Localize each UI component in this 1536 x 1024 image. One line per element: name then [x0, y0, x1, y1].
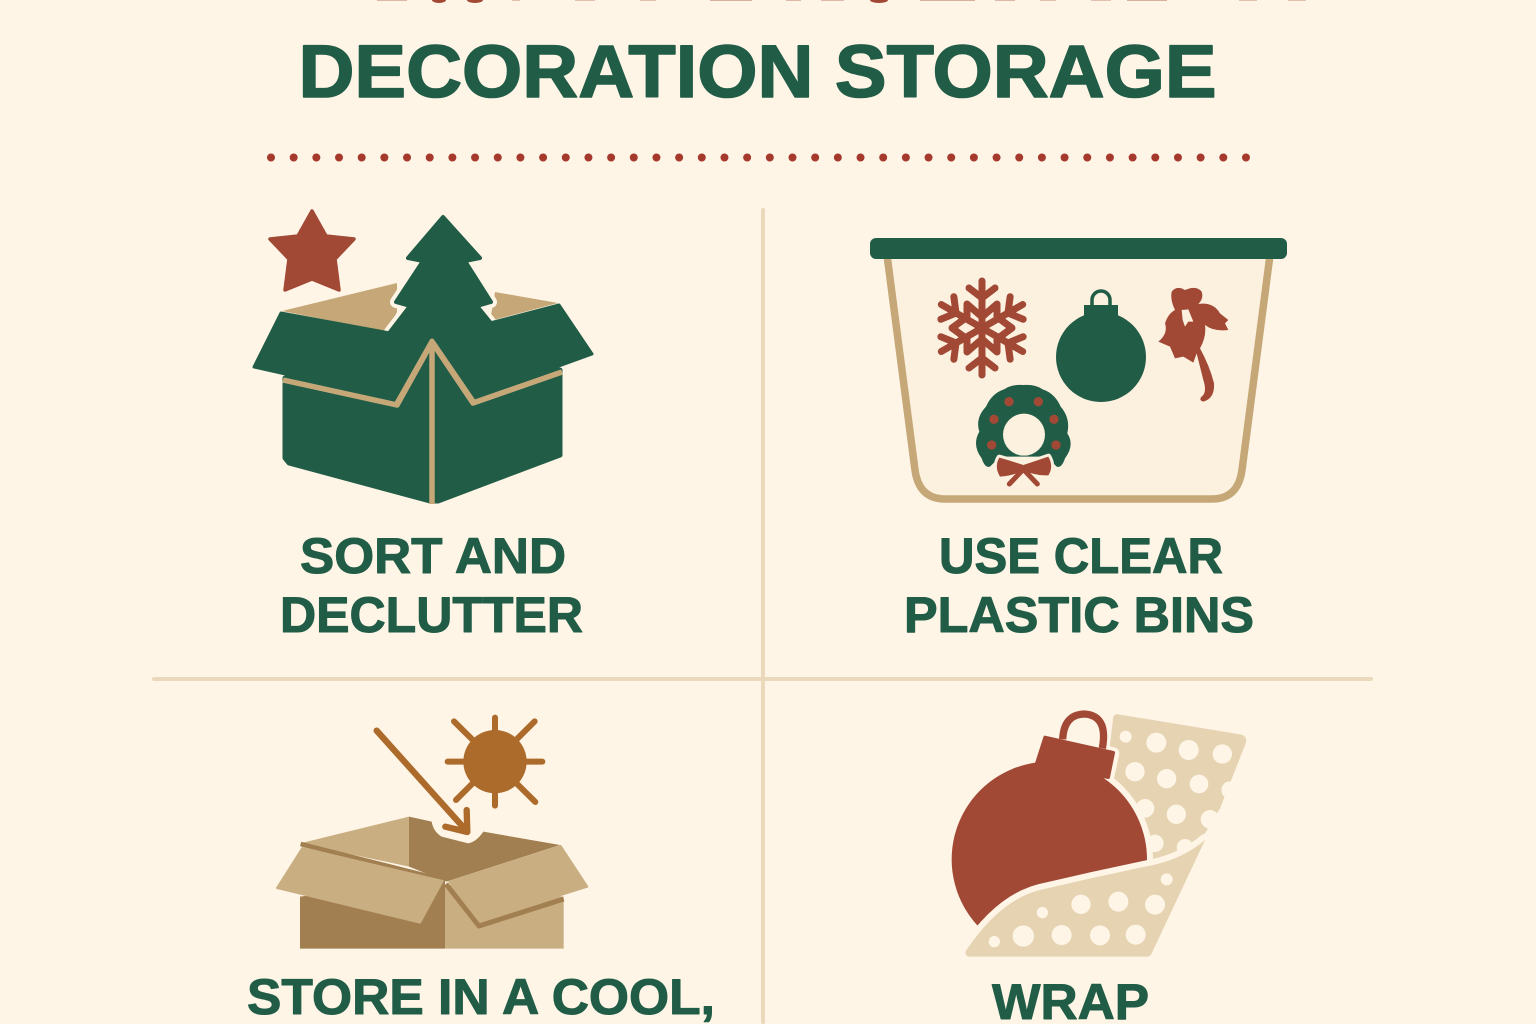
- icon: arrow into box: [377, 731, 467, 832]
- bubble wrap back sheet: [1103, 714, 1246, 873]
- panel: use clear plastic bins: [870, 238, 1287, 643]
- label: store in a cool: STORE IN A COOL,: [247, 969, 715, 1024]
- icon: wreath: [976, 385, 1071, 484]
- clipped heading remnant at top edge: [377, 0, 1306, 3]
- label: sort and declutter: SORT AND: [300, 528, 566, 584]
- icon: ornament wrapped in bubble wrap: [930, 714, 1246, 960]
- icon: cardboard box: [277, 817, 587, 949]
- icon: ribbon bow: [1158, 288, 1228, 402]
- dotted divider: [271, 154, 1246, 162]
- label: sort and declutter: DECLUTTER: [280, 587, 583, 643]
- label: use clear plastic bins: PLASTIC BINS: [904, 587, 1254, 643]
- panel: sort and declutter: [254, 211, 592, 643]
- label: sort and declutter: [280, 528, 583, 643]
- panel: store in a cool place: [247, 718, 715, 1024]
- red ornament: [952, 714, 1147, 957]
- label: use clear plastic bins: USE CLEAR: [939, 528, 1223, 584]
- icon: clear bin: [870, 238, 1287, 499]
- icon: green ornament: [1056, 291, 1146, 402]
- bubble wrap front sheet: [930, 840, 1205, 960]
- icon: sun: [448, 718, 542, 806]
- panel: wrap: [930, 714, 1246, 1024]
- label: use clear plastic bins: [904, 528, 1254, 643]
- title: DECORATION STORAGE: [298, 30, 1216, 113]
- icon: star: [270, 211, 354, 290]
- grid dividers: [152, 208, 1373, 1024]
- icon: snowflake: [935, 281, 1029, 375]
- icon: open green box with tree: [254, 217, 592, 504]
